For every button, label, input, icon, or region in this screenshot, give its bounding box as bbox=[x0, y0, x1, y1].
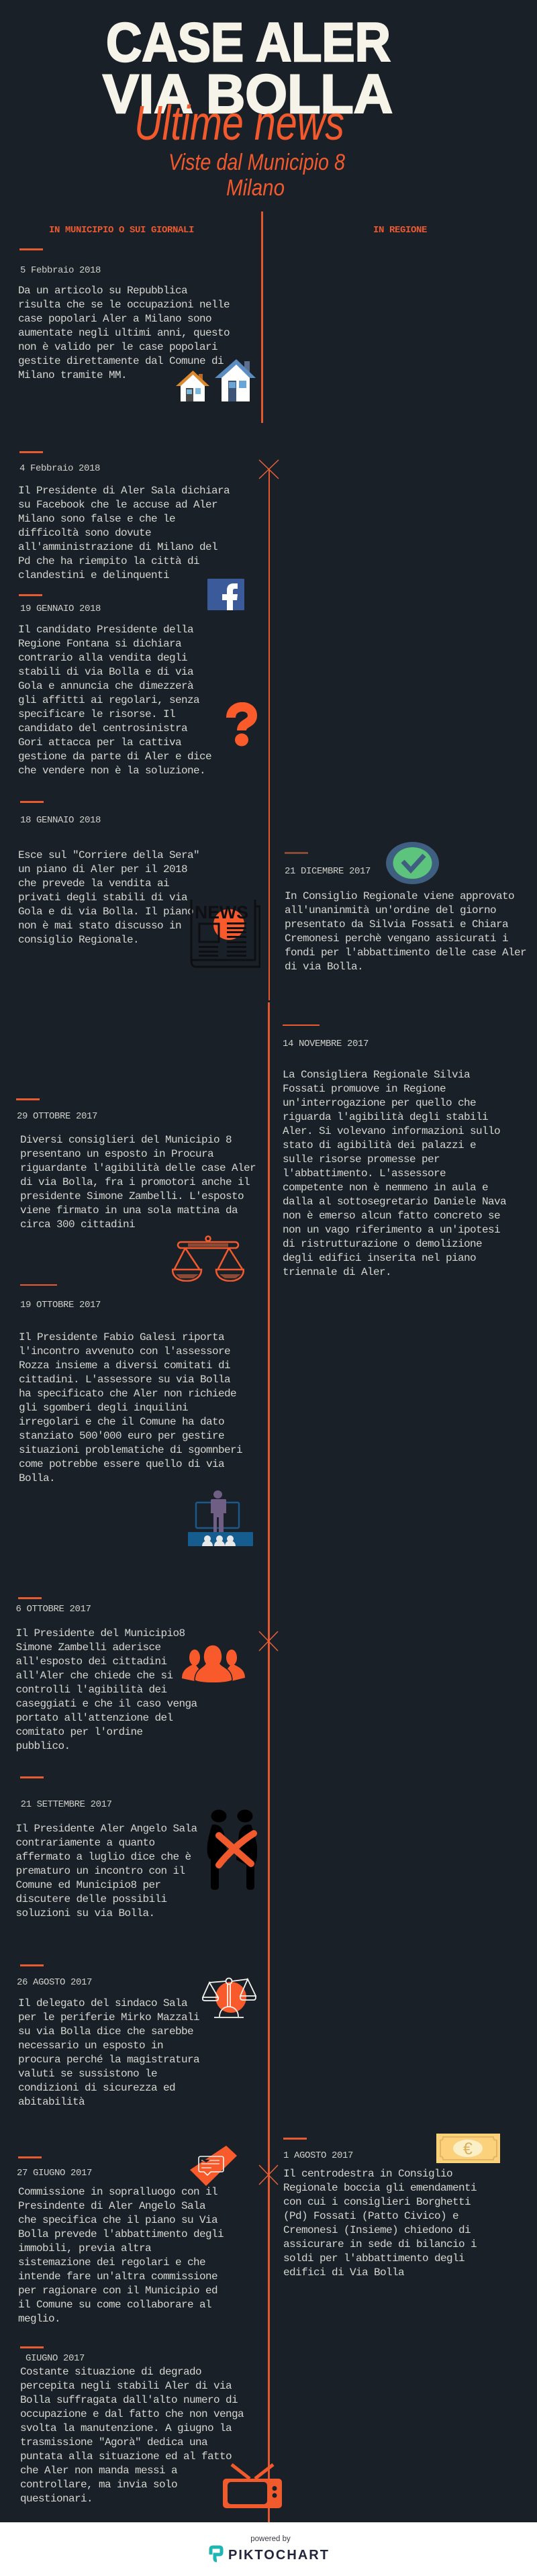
panel: 21 Settembre 2017: Il Presidente Aler Angelo Sala contrariamente a quanto affermato a luglio dice che è prematuro un incontro con il Comune ed Municipio8 per discutere delle possibili soluzioni su via Bolla. bbox=[16, 1823, 197, 1919]
panel: 6 Ottobre 2017 bbox=[16, 1597, 245, 1752]
panel: 6 Ottobre 2017: Il Presidente del Municipio8 Simone Zambelli aderisce all'esposto dei cittadini all'Aler che chiede che si controlli l'agibilità dei caseggiati e che il caso venga portato all'attenzione del comitato per l'ordine pubblico. bbox=[16, 1627, 197, 1752]
footer: powered by piktochart bbox=[0, 2522, 537, 2576]
panel: 29 Ottobre 2017: 29 OTTOBRE 2017 bbox=[17, 1111, 97, 1122]
panel: 26 Agosto 2017: Il delegato del sindaco Sala per le periferie Mirko Mazzali su via Bolla dice che sarebbe necessario un esposto in procura perché la magistratura valuti se sussistono le condizioni di sicurezza ed abitabilità bbox=[18, 1997, 199, 2108]
main title: VIA BOLLA: VIA BOLLA bbox=[103, 64, 393, 125]
icon: houses bbox=[176, 359, 256, 401]
footer logo mark bbox=[209, 2546, 223, 2562]
panel: 1 Agosto 2017: Il centrodestra in Consiglio Regionale boccia gli emendamenti con cui i consiglieri Borghetti (Pd) Fossati (Patto Civico) e Cremonesi (Insieme) chiedono di assicurare in sede di bilancio i soldi per l'abbattimento degli edifici di Via Bolla bbox=[283, 2168, 477, 2279]
timeline: lower segment bbox=[268, 1002, 270, 2522]
panel: 4 Febbraio 2018: Il Presidente di Aler Sala dichiara su Facebook che le accuse ad Aler Milano sono false e che le difficoltà sono dovute all'amministrazione di Milano del Pd che ha riempito la città di clandestini e delinquenti bbox=[18, 485, 230, 581]
column heading: in municipio: IN MUNICIPIO O SUI GIORNALI bbox=[49, 225, 194, 236]
icon: group of people bbox=[182, 1645, 245, 1682]
icon: euro banknote: € bbox=[463, 2140, 473, 2158]
panel: 18 Gennaio 2018 bbox=[18, 801, 260, 968]
panel: 14 Novembre 2017: 14 NOVEMBRE 2017 bbox=[283, 1039, 369, 1049]
icon: two people with red cross bbox=[207, 1810, 257, 1890]
panel: Giugno 2017: Costante situazione di degrado percepita negli stabili Aler di via Bolla suffragata dall'alto numero di occupazione e dal fatto che non venga svolta la manutenzione. A giugno la trasmissione "Agorà" dedica una puntata alla situazione ed al fatto che Aler non manda messi a controllare, ma invia solo questionari. bbox=[20, 2366, 244, 2505]
panel: 26 Agosto 2017 bbox=[17, 1964, 256, 2108]
subtitle: Viste dal Municipio 8: Viste dal Municipio 8 bbox=[168, 150, 345, 175]
panel: 19 Gennaio 2018: 19 GENNAIO 2018 bbox=[20, 604, 101, 614]
panel: 4 Febbraio 2018: 4 Febbraio 2018 bbox=[19, 463, 100, 474]
panel: 26 Agosto 2017: 26 AGOSTO 2017 bbox=[17, 1977, 92, 1988]
panel: 19 Ottobre 2017: Il Presidente Fabio Galesi riporta l'incontro avvenuto con l'assessore Rozza insieme a diversi comitati di cittadini. L'assessore su via Bolla ha specificato che Aler non richiede gli sgomberi degli inquilini irregolari e che il Comune ha dato stanziato 500'000 euro per gestire situazioni problematiche di sgomnberi come potrebbe essere quello di via Bolla. bbox=[19, 1331, 242, 1484]
panel: 5 Febbraio 2018 bbox=[18, 248, 256, 401]
timeline cross markers bbox=[259, 459, 279, 2185]
panel: 27 Giugno 2017: 27 GIUGNO 2017 bbox=[17, 2168, 92, 2179]
panel: Giugno 2017: GIUGNO 2017 bbox=[26, 2353, 85, 2364]
icon: question mark bbox=[226, 702, 257, 747]
icon: newspaper bbox=[191, 900, 260, 968]
panel: 21 Settembre 2017: 21 SETTEMBRE 2017 bbox=[21, 1799, 112, 1810]
panel: 19 Ottobre 2017: 19 OTTOBRE 2017 bbox=[20, 1300, 101, 1310]
panel: 5 Febbraio 2018: Da un articolo su Repubblica risulta che se le occupazioni nelle case popolari Aler a Milano sono aumentate negli ultimi anni, questo non è valido per le case popolari gestite direttamente dal Comune di Milano tramite MM. bbox=[18, 285, 230, 381]
column heading: in regione: IN REGIONE bbox=[373, 225, 427, 236]
panel: 19 Gennaio 2018: Il candidato Presidente della Regione Fontana si dichiara contrario alla vendita degli stabili di via Bolla e di via Gola e annuncia che dimezzerà gli affitti ai regolari, senza specificare le risorse. Il candidato del centrosinistra Gori attacca per la cattiva gestione da parte di Aler e dice che vendere non è la soluzione. bbox=[18, 623, 211, 776]
panel: 21 Dicembre 2017: 21 DICEMBRE 2017 bbox=[285, 866, 371, 877]
panel: 29 Ottobre 2017 bbox=[16, 1098, 256, 1282]
timeline: middle segment bbox=[268, 470, 270, 1000]
panel: 21 Dicembre 2017: In Consiglio Regionale viene approvato all'unaninmità un'ordine del giorno presentato da Silvia Fossati e Chiara Cremonesi perchè vengano assicurati i fondi per l'abbattimento delle case Aler di via Bolla. bbox=[285, 890, 526, 973]
icon: scales on orange circle bbox=[202, 1978, 256, 2018]
icon: euro banknote bbox=[436, 2134, 500, 2163]
icon: newspaper: NEWS bbox=[195, 902, 248, 922]
panel: 21 Settembre 2017 bbox=[16, 1776, 257, 1919]
icon: presenter and audience bbox=[188, 1490, 253, 1546]
panel: 27 Giugno 2017: Commissione in sopralluogo con il Presindente di Aler Angelo Sala che specifica che il piano su Via Bolla prevede l'abbattimento degli immobili, previa altra sistemazione dei regolari e che intende fare un'altra commissione per ragionare con il Municipio ed il Comune su come collaborare al meglio. bbox=[18, 2186, 224, 2325]
panel: 18 Gennaio 2018: 18 GENNAIO 2018 bbox=[20, 815, 101, 826]
panel: 4 Febbraio 2018 bbox=[18, 451, 244, 610]
marker 2 bbox=[259, 1631, 278, 1651]
timeline: top segment bbox=[261, 211, 263, 423]
footer text: powered by: powered by bbox=[250, 2535, 291, 2543]
icon: chat bubble on diamond bbox=[190, 2146, 237, 2186]
icon: balance scales bbox=[172, 1235, 244, 1282]
subtitle: Milano: Milano bbox=[226, 175, 285, 201]
panel: 19 Gennaio 2018 bbox=[18, 594, 257, 776]
marker 3 bbox=[259, 2165, 278, 2185]
panel: 14 Novembre 2017: La Consigliera Regionale Silvia Fossati promuove in Regione un'interrogazione per quello che riguarda l'agibilità degli stabili Aler. Si volevano informazioni sullo stato di agibilità dei palazzi e sulle risorse promesse per l'abbattimento. L'assessore competente non è nemmeno in aula e dalla al sottosegretario Daniele Nava non è emerso alcun fatto concreto se non un vago riferimento a un'ipotesi di ristrutturazione o demolizione degli edifici inserita nel piano triennale di Aler. bbox=[283, 1069, 506, 1278]
panel: 1 Agosto 2017 bbox=[283, 2134, 500, 2279]
main title: CASE ALER: CASE ALER bbox=[106, 12, 391, 73]
panel: 1 Agosto 2017: 1 AGOSTO 2017 bbox=[283, 2150, 353, 2161]
panel: 21 Dicembre 2017 bbox=[285, 842, 526, 973]
title block bbox=[102, 12, 393, 201]
panel: 19 Ottobre 2017 bbox=[19, 1284, 253, 1546]
panel: 18 Gennaio 2018: Esce sul "Corriere della Sera" un piano di Aler per il 2018 che prevede la vendita ai privati degli stabili di via Gola e di via Bolla. Il piano non è mai stato discusso in consiglio Regionale. bbox=[18, 849, 199, 945]
icon: check mark bbox=[386, 842, 439, 884]
panel: 6 Ottobre 2017: 6 OTTOBRE 2017 bbox=[16, 1604, 91, 1615]
panel: 5 Febbraio 2018: 5 Febbraio 2018 bbox=[20, 265, 101, 276]
panel: 29 Ottobre 2017: Diversi consiglieri del Municipio 8 presentano un esposto in Procura riguardante l'agibilità delle case Aler di via Bolla, fra i promotori anche il presidente Simone Zambelli. L'esposto viene firmato in una sola mattina da circa 300 cittadini bbox=[20, 1133, 256, 1230]
subtitle: Ultime news: Ultime news bbox=[134, 97, 344, 150]
marker 1 bbox=[259, 460, 279, 479]
icon: television bbox=[223, 2463, 282, 2508]
icon: facebook bbox=[207, 579, 244, 610]
